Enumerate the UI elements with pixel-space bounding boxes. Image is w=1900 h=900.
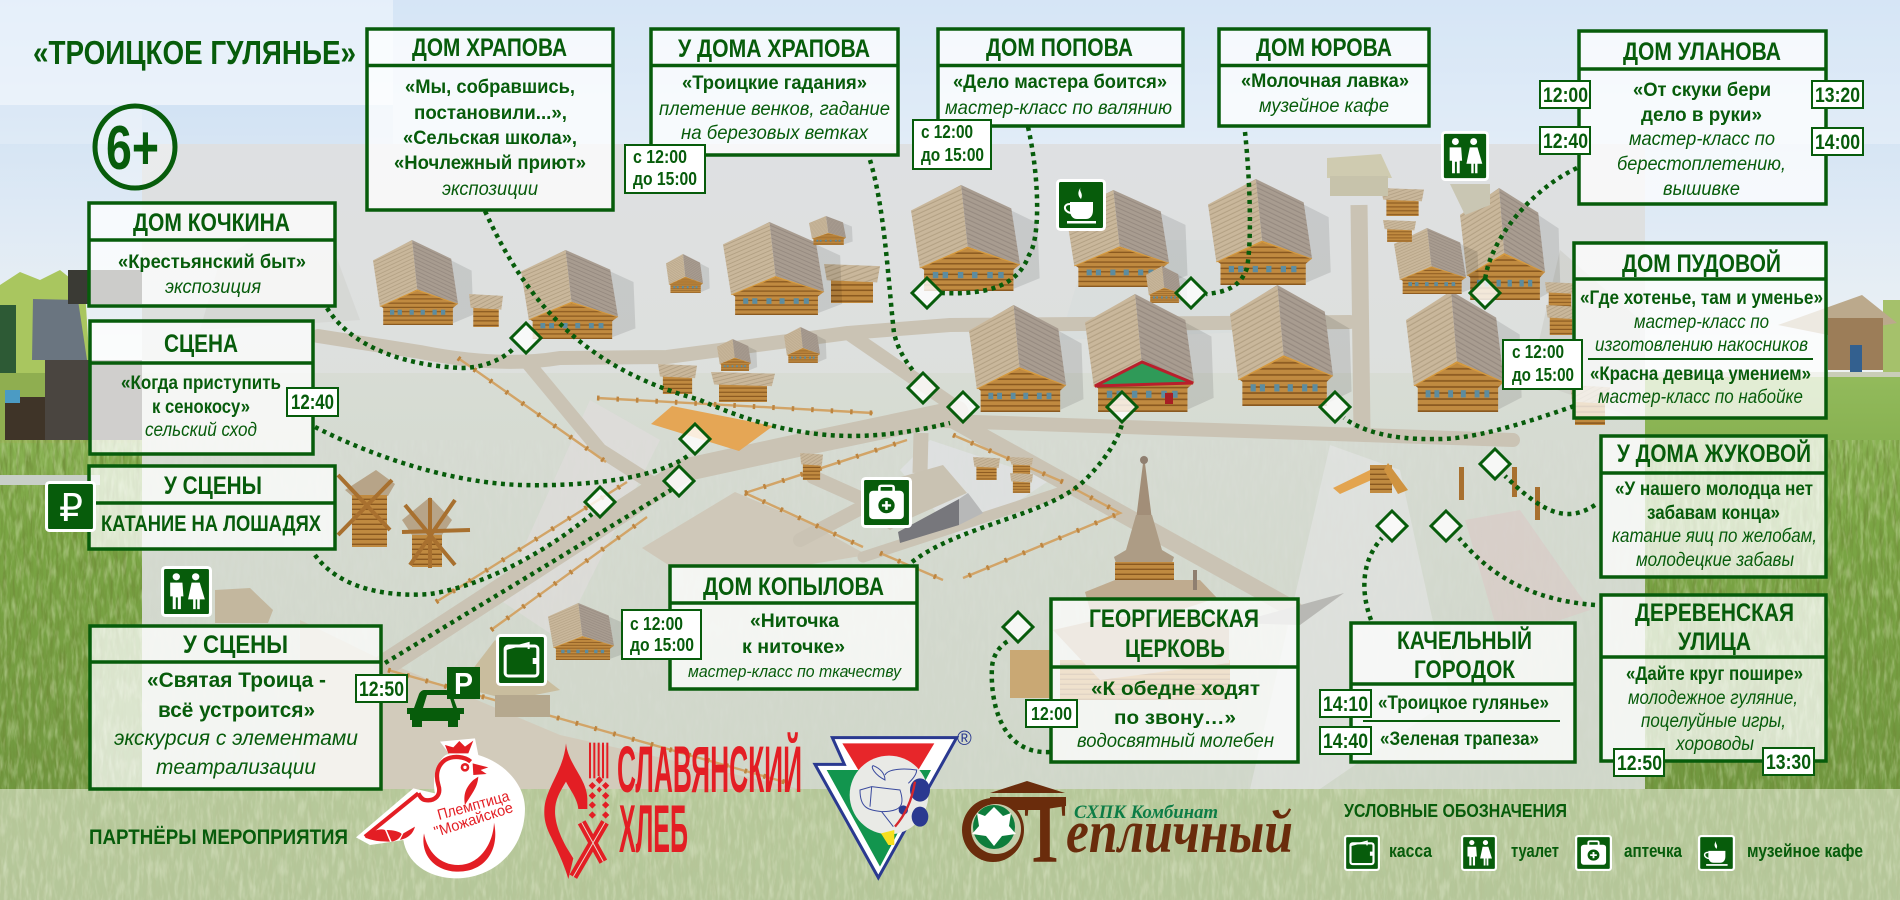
panel: Дом Попова [913,29,1183,169]
icon: cafe [1058,180,1104,230]
map area overlay [142,144,1645,789]
time tags: 13:30 [1766,751,1811,774]
text block: музейное кафе [1259,96,1389,117]
text block [945,72,1172,119]
time tag [625,145,705,193]
icon: toilet top [1442,132,1488,180]
text block: плетение венков, гадание [659,99,890,120]
partners heading: ПАРТНЁРЫ МЕРОПРИЯТИЯ [89,826,348,849]
heading: ДОМ КОПЫЛОВА [703,573,884,601]
map: location diamonds [511,278,1510,642]
time tag [287,388,338,416]
text block: водосвятный молебен [1077,731,1275,752]
text block: театрализации [156,756,316,779]
text block: по звону…» [1114,708,1236,729]
text block: экспозиции [442,179,538,200]
heading: У ДОМА ЖУКОВОЙ [1617,438,1811,468]
text block [394,77,586,200]
text block: к сенокосу» [152,397,250,418]
time tag: до 15:00 [1512,365,1574,385]
panel: У дома Храпова [625,29,898,193]
text block: «Где хотенье, там и уменье» [1580,288,1823,309]
text block: «Сельская школа», [403,128,577,149]
panel: Дом Копылова [622,566,917,689]
logo: Племптица Можайское [356,738,525,878]
time tag: с 12:00 [633,147,687,167]
text block: катание яиц по желобам, [1612,526,1817,547]
legend: туалет: туалет [1511,841,1559,861]
map: church [1010,455,1230,700]
heading [1397,625,1532,684]
heading: У СЦЕНЫ [183,631,288,659]
text block: мастер-класс по [1634,312,1769,333]
panel: Деревенская улица [1601,595,1826,776]
text block: экскурсия с элементами [114,727,358,750]
text: СЛАВЯНСКИЙ [617,731,802,806]
text block: молодежное гуляние, [1628,688,1798,709]
logo: Славянский хлеб: ХЛЕБ [619,791,688,867]
panel: Дом Храпова [367,29,613,210]
map: fences [388,358,1120,783]
text block [688,611,902,681]
time tag: 12:00 [1031,704,1072,724]
map: ticket office building [459,603,626,717]
legend: касса: касса [1389,841,1433,861]
legend: музейное кафе [1699,836,1863,870]
heading [1635,599,1794,656]
heading [1089,605,1259,663]
text block [121,373,281,441]
text block: берестоплетению, [1617,154,1786,175]
text block [1580,288,1823,408]
age badge 6+: 6+ [106,114,159,183]
faint background figures [200,230,1640,789]
panel: У сцены, катание на лошадях [89,466,335,549]
text block: изготовлению накосников [1595,335,1808,356]
text block [659,73,890,144]
time tag [1026,700,1077,727]
map: roads [300,205,1513,789]
text block [1626,664,1803,755]
legend [1344,801,1863,870]
time tag: до 15:00 [921,145,984,165]
text block: «Святая Троица - [147,669,326,692]
text block: «От скуки бери [1633,80,1771,101]
heading: СЦЕНА [164,330,238,358]
panel: Дом Кочкина [89,203,335,306]
time tag: до 15:00 [633,169,697,189]
panel: Сцена [90,321,338,454]
time tag [913,120,991,169]
top-left light overlay [0,0,393,105]
text block: «Дайте круг пошире» [1626,664,1803,685]
heading: КАЧЕЛЬНЫЙ [1397,625,1532,655]
time tags: 12:40 [1543,130,1588,153]
text block: «Молочная лавка» [1241,71,1409,92]
time tags: 13:20 [1815,84,1860,107]
text block: «Троицкое гулянье» [1378,693,1549,714]
logo: Тепличный: епличный [1066,799,1293,865]
text block: «Троицкие гадания» [682,73,867,94]
text block: сельский сход [145,420,257,441]
text block [1617,80,1786,200]
heading: ДЕРЕВЕНСКАЯ [1635,599,1794,627]
text block: забавам конца» [1647,503,1780,524]
text block: «Дело мастера боится» [953,72,1167,93]
heading: У СЦЕНЫ [164,472,262,500]
text block: «У нашего молодца нет [1615,479,1813,500]
time tag [1503,340,1582,389]
map: dotted connector lines [315,127,1595,752]
logo: Племптица Можайское: "Можайское [432,799,515,841]
text block: мастер-класс по ткачеству [688,662,902,681]
time tags: 12:00 [1543,84,1588,107]
time tags: 14:10 [1323,693,1368,716]
map: stage shed [215,588,273,623]
legend: касса [1345,836,1433,870]
time tag: 12:50 [359,678,404,701]
legend: туалет [1462,836,1559,870]
time tags: 14:40 [1323,730,1368,753]
legend heading: УСЛОВНЫЕ ОБОЗНАЧЕНИЯ [1344,801,1567,821]
logo: Племптица Можайское: Племптица [436,788,512,824]
icon: first aid [863,478,910,527]
time tag: с 12:00 [921,122,973,142]
icon: parking: P [454,666,473,701]
text block [1378,693,1549,750]
text block: мастер-класс по валянию [945,98,1172,119]
heading: ДОМ ПОПОВА [986,34,1133,62]
panel: Дом Пудовой [1503,243,1826,418]
text block: мастер-класс по [1629,129,1775,150]
text block [118,252,306,298]
heading: ГОРОДОК [1414,656,1516,684]
text block [114,669,358,779]
text block: «Крестьянский быт» [118,252,306,273]
panel: У сцены, экскурсия [90,626,407,789]
heading: ДОМ ХРАПОВА [412,34,567,62]
text block: «Ниточка [750,611,839,632]
text: КАТАНИЕ НА ЛОШАДЯХ [101,511,321,536]
icon: ticket office [498,636,545,684]
time tag: 12:40 [291,391,334,414]
text block: мастер-класс по набойке [1598,387,1803,408]
heading: ДОМ КОЧКИНА [133,209,290,237]
text block: экспозиция [165,277,261,298]
panel: Качельный городок [1320,623,1575,762]
map: first-aid building [860,465,983,543]
time tag: с 12:00 [630,614,683,634]
text block: «К обедне ходят [1091,679,1260,700]
title: «ТРОИЦКОЕ ГУЛЯНЬЕ» [33,34,356,71]
heading: ДОМ ПУДОВОЙ [1622,248,1781,278]
panel: Дом Юрова [1219,29,1429,126]
time tags: 14:00 [1815,131,1860,154]
top sky overlay [393,0,1900,144]
text block: хороводы [1675,734,1754,755]
logo: triangle with cow [815,728,972,878]
text block: поцелуйные игры, [1641,711,1786,732]
logo: triangle with cow: ® [957,728,972,750]
text block: «Когда приступить [121,373,281,394]
map: wooden platform [651,406,773,451]
time tags [1540,81,1863,155]
text block: на березовых ветках [681,123,869,144]
map: gray service buildings [1327,154,1490,215]
text block [1612,479,1817,571]
logo: Тепличный [962,776,1293,884]
heading: УЛИЦА [1678,628,1751,656]
map: houses [373,179,1610,493]
text block: дело в руки» [1641,105,1762,126]
logo: Славянский хлеб [544,731,802,879]
text block: всё устроится» [158,699,315,722]
text block: вышивке [1663,179,1740,200]
text block: молодецкие забавы [1636,550,1794,571]
legend: музейное кафе: музейное кафе [1747,841,1863,861]
legend: аптечка [1576,836,1683,870]
time tags [1614,748,1814,776]
time tags: 12:50 [1617,752,1662,775]
icon: parking [447,666,480,701]
text block [1077,679,1275,752]
legend: аптечка: аптечка [1624,841,1683,861]
logo: Тепличный: Т [1024,776,1066,884]
text block: «Красна девица умением» [1590,364,1811,385]
icon: ruble: ₽ [59,486,83,530]
icon: ruble [47,482,94,531]
panel: Георгиевская церковь [1026,599,1298,762]
time tag: до 15:00 [630,635,694,655]
map: playground [1333,463,1540,520]
heading: У ДОМА ХРАПОВА [678,35,870,63]
text block: к ниточке» [742,637,845,658]
text block: постановили...», [414,103,567,124]
heading: ЦЕРКОВЬ [1125,635,1225,663]
panel: У дома Жуковой [1601,436,1826,577]
logo: Тепличный: СХПК Комбинат [1074,802,1218,823]
map: windmills [338,470,470,568]
bottom partners strip overlay [0,789,1900,900]
time tag: с 12:00 [1512,342,1564,362]
text block: «Ночлежный приют» [394,153,586,174]
icon: toilet left [163,567,210,616]
panel: Дом Уланова [1540,31,1863,204]
left sky overlay [0,105,142,144]
icon: car [407,690,464,727]
text block: «Мы, собравшись, [405,77,575,98]
text block [1241,71,1409,117]
time tag [622,610,701,659]
time tags [1320,690,1371,754]
heading: ГЕОРГИЕВСКАЯ [1089,605,1259,633]
heading: ДОМ ЮРОВА [1256,34,1392,62]
text block: «Зеленая трапеза» [1380,729,1539,750]
heading: ДОМ УЛАНОВА [1623,38,1781,66]
